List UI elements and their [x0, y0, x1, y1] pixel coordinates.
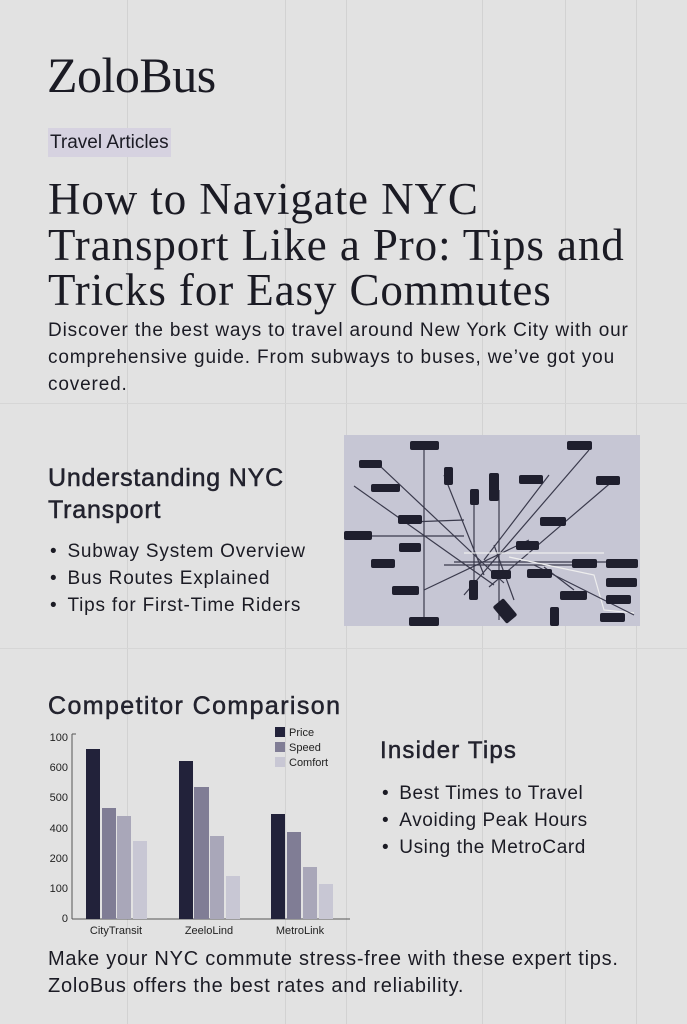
bullet list: insider tips: Using the MetroCard [399, 837, 586, 858]
bar chart: competitor comparison: MetroLink [276, 925, 325, 937]
intro paragraph [48, 320, 629, 395]
tag: Travel Articles: Travel Articles [50, 132, 169, 153]
section heading: Understanding NYC Transport: Understanding NYC [48, 464, 284, 492]
closing text: Make your NYC commute stress-free with these expert tips. [48, 948, 619, 970]
bar chart: competitor comparison: CityTransit [90, 925, 142, 937]
subway map image [344, 435, 640, 626]
bullet list: transport topics: Tips for First-Time Riders [67, 595, 301, 616]
bullet list: transport topics: Subway System Overview [67, 541, 306, 562]
bar chart: competitor comparison: Price [289, 727, 314, 739]
closing text [48, 948, 619, 997]
bar chart: competitor comparison: Comfort [289, 757, 328, 769]
headline: Transport Like a Pro: Tips and [48, 220, 625, 270]
bar chart: competitor comparison [50, 727, 350, 937]
bullet list: transport topics: Bus Routes Explained [67, 568, 270, 589]
bar chart: competitor comparison: 0 [62, 913, 68, 925]
intro paragraph: covered. [48, 374, 128, 395]
closing text: ZoloBus offers the best rates and reliability. [48, 975, 464, 997]
bar chart: competitor comparison: ZeeloLind [185, 925, 233, 937]
bar chart: competitor comparison: Speed [289, 742, 321, 754]
section heading: Competitor Comparison: Competitor Comparison [48, 692, 341, 720]
bar chart: competitor comparison: 200 [50, 853, 68, 865]
section heading: Insider Tips: Insider Tips [380, 737, 517, 764]
bullet list: insider tips: Avoiding Peak Hours [399, 810, 588, 831]
bar chart: competitor comparison: 600 [50, 762, 68, 774]
bullet list: insider tips: Best Times to Travel [399, 783, 583, 804]
intro paragraph: Discover the best ways to travel around New York City with our [48, 320, 629, 341]
headline [48, 174, 625, 315]
bullet list: transport topics [50, 541, 306, 616]
headline: Tricks for Easy Commutes [48, 265, 552, 315]
bar chart: competitor comparison: 100 [50, 883, 68, 895]
section heading: Understanding NYC Transport: Transport [48, 496, 161, 524]
bar chart: competitor comparison: 500 [50, 792, 68, 804]
bar chart: competitor comparison: 400 [50, 823, 68, 835]
section heading: Understanding NYC Transport [48, 464, 284, 524]
intro paragraph: comprehensive guide. From subways to buses, we’ve got you [48, 347, 615, 368]
title: ZoloBus: ZoloBus [47, 47, 216, 103]
bullet list: insider tips [382, 783, 588, 858]
bar chart: competitor comparison: 100 [50, 732, 68, 744]
headline: How to Navigate NYC [48, 174, 479, 224]
